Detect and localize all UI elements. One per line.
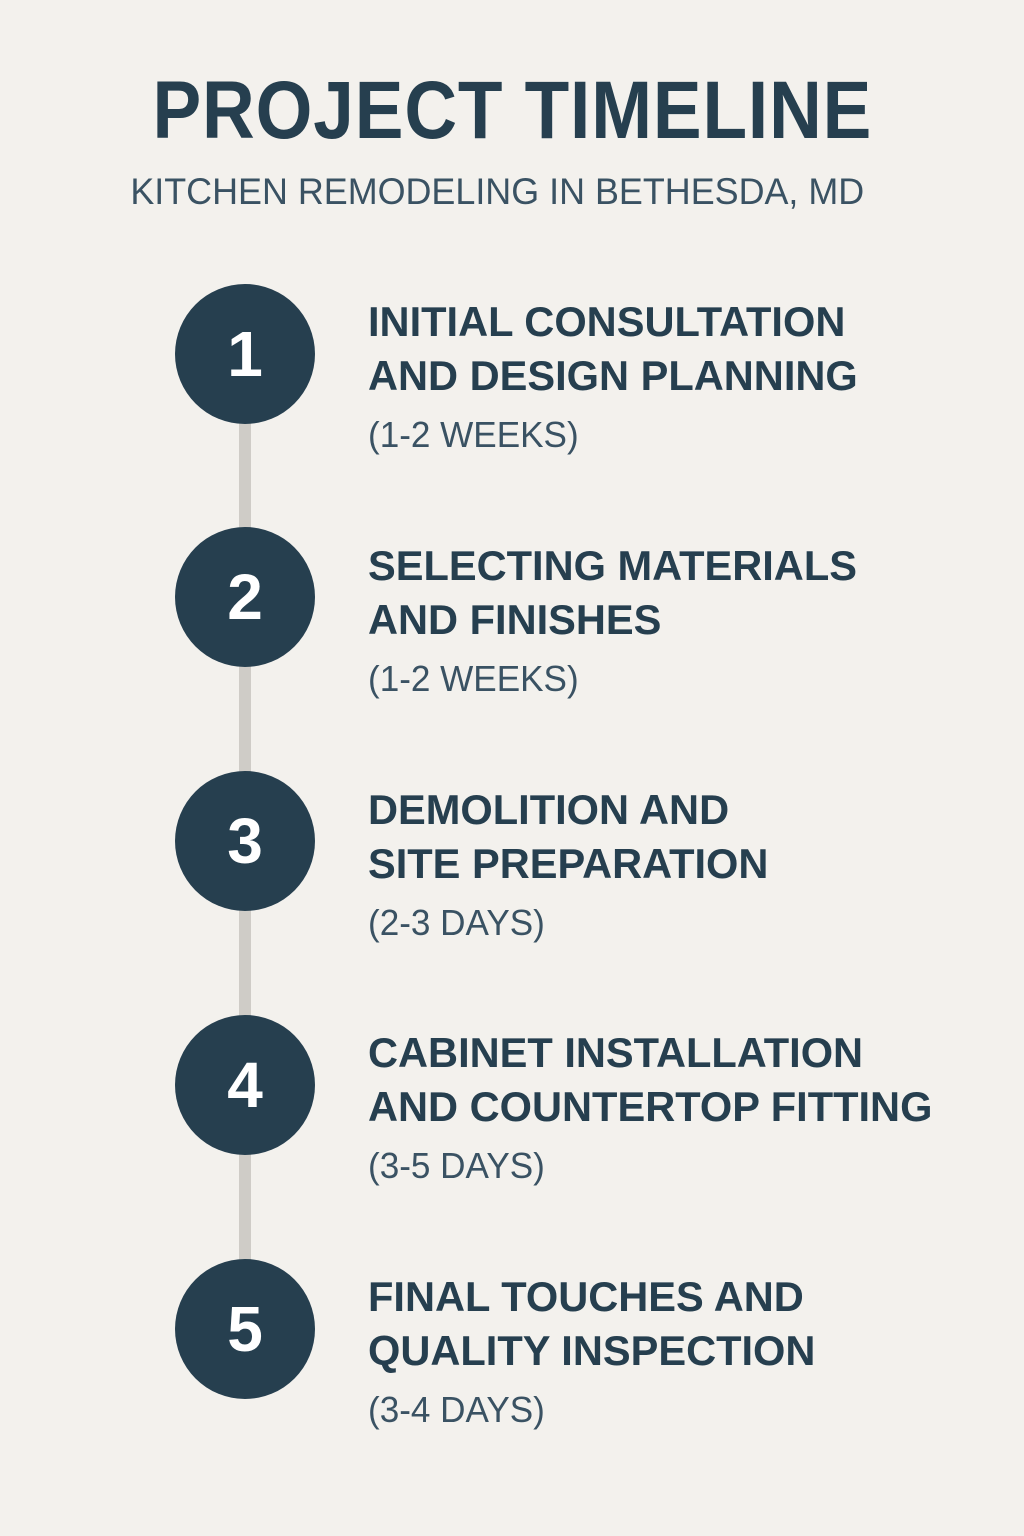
step 2 text: AND FINISHES: [368, 596, 661, 643]
step 3 text: (2-3 DAYS): [368, 902, 545, 943]
step 3 number circle: 3: [227, 805, 263, 877]
step 4 text: CABINET INSTALLATION: [368, 1029, 863, 1076]
step 5 text: (3-4 DAYS): [368, 1389, 545, 1430]
step 4 text: AND COUNTERTOP FITTING: [368, 1083, 932, 1130]
step 2 number circle: 2: [227, 561, 263, 633]
step 2 text: [368, 542, 857, 699]
step 5 text: QUALITY INSPECTION: [368, 1327, 815, 1374]
step 3 number circle: [175, 771, 315, 911]
step 2 number circle: [175, 527, 315, 667]
step 1 number circle: 1: [227, 318, 263, 390]
step 3 text: SITE PREPARATION: [368, 840, 768, 887]
step 3 text: DEMOLITION AND: [368, 786, 729, 833]
step 4 text: [368, 1029, 932, 1186]
step 1 number circle: [175, 284, 315, 424]
step 4 number circle: 4: [227, 1049, 263, 1121]
step 1 text: INITIAL CONSULTATION: [368, 298, 845, 345]
timeline connector line: [239, 354, 251, 1329]
step 1 text: (1-2 WEEKS): [368, 414, 579, 455]
step 4 number circle: [175, 1015, 315, 1155]
step 5 text: [368, 1273, 815, 1430]
step 5 text: FINAL TOUCHES AND: [368, 1273, 804, 1320]
step 1 text: [368, 298, 858, 455]
step 3 text: [368, 786, 768, 943]
step 5 number circle: 5: [227, 1293, 263, 1365]
step 2 text: (1-2 WEEKS): [368, 658, 579, 699]
subtitle: KITCHEN REMODELING IN BETHESDA, MD: [130, 171, 864, 212]
step 4 text: (3-5 DAYS): [368, 1145, 545, 1186]
step 5 number circle: [175, 1259, 315, 1399]
step 2 text: SELECTING MATERIALS: [368, 542, 857, 589]
title: PROJECT TIMELINE: [152, 65, 872, 156]
step 1 text: AND DESIGN PLANNING: [368, 352, 858, 399]
